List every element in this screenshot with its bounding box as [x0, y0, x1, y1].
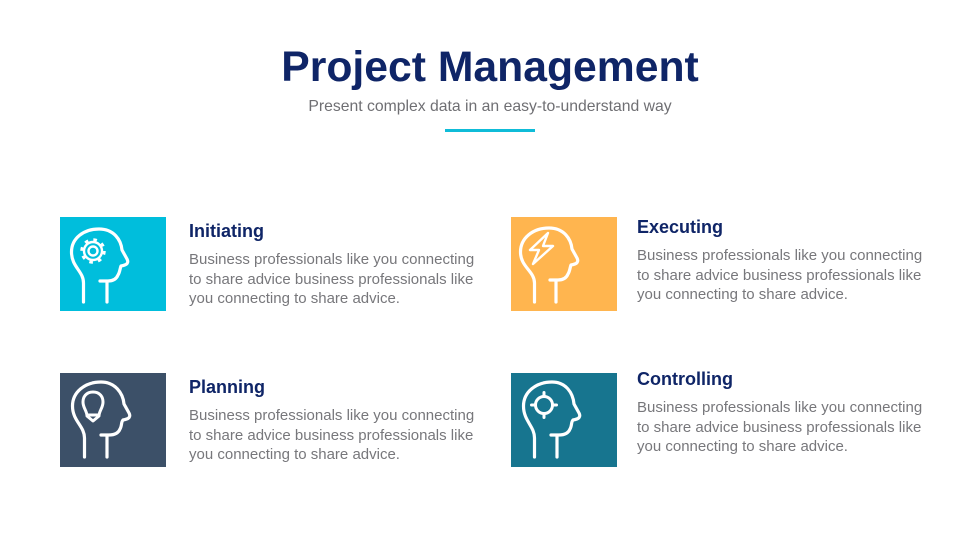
- accent underline: [445, 129, 535, 132]
- icon tile: executing head with lightning bolt: [511, 217, 617, 311]
- body text: Executing: [637, 247, 922, 303]
- body text: Initiating: Business professionals like you connecting: [189, 251, 474, 268]
- body text: Executing: Business professionals like you connecting: [637, 247, 922, 264]
- heading: Executing: Executing: [637, 217, 723, 237]
- body text: Controlling: [637, 399, 922, 455]
- body text: Controlling: you connecting to share advice.: [637, 438, 848, 455]
- body text: Initiating: [189, 251, 474, 307]
- body text: Planning: [189, 407, 474, 463]
- heading: Controlling: Controlling: [637, 369, 733, 389]
- body text: Initiating: you connecting to share advice.: [189, 290, 400, 307]
- title: Project Management: [281, 43, 699, 91]
- body text: Initiating: to share advice business professionals like: [189, 270, 473, 288]
- body text: Executing: to share advice business professionals like: [637, 266, 921, 284]
- heading: Planning: Planning: [189, 377, 265, 397]
- icon tile: planning head with light bulb: [60, 373, 166, 467]
- body text: Planning: you connecting to share advice.: [189, 446, 400, 463]
- icon tile: controlling head with target: [511, 373, 617, 467]
- heading: Initiating: Initiating: [189, 221, 264, 241]
- body text: Controlling: to share advice business professionals like: [637, 418, 921, 436]
- icon tile: initiating head with gear: [60, 217, 166, 311]
- body text: Planning: to share advice business professionals like: [189, 426, 473, 444]
- body text: Executing: you connecting to share advice.: [637, 286, 848, 303]
- subtitle: Present complex data in an easy-to-understand way: [308, 98, 672, 115]
- body text: Controlling: Business professionals like you connecting: [637, 399, 922, 416]
- body text: Planning: Business professionals like you connecting: [189, 407, 474, 424]
